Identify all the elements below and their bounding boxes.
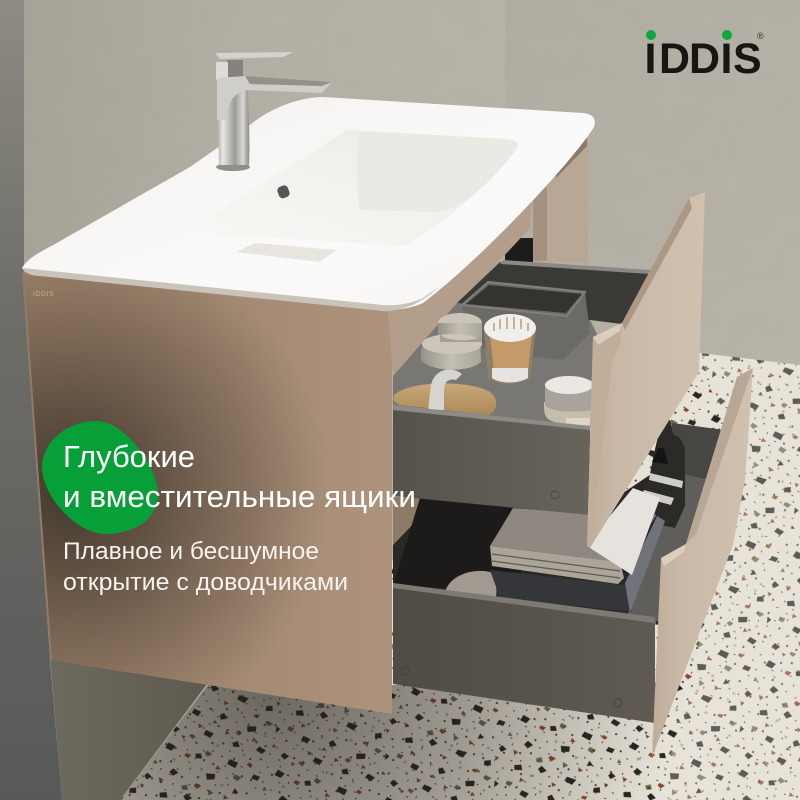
dark towel — [490, 570, 632, 612]
terrazzo floor — [120, 353, 800, 800]
lower drawer right wall — [628, 423, 724, 622]
basin reflection — [236, 243, 336, 262]
lower drawer front panel — [652, 368, 753, 757]
upper drawer front panel — [587, 192, 705, 548]
subheading — [63, 538, 348, 596]
cabinet body — [22, 272, 392, 714]
logo: IDDIS: IDDIS — [644, 35, 762, 83]
upper drawer floor — [393, 303, 600, 428]
cork brush — [393, 369, 496, 415]
heading: Глубокие — [63, 439, 195, 474]
faucet — [215, 52, 332, 171]
heading: и вместительные ящики — [63, 479, 416, 514]
logo: IDDIS: ® — [757, 31, 764, 41]
subheading: Плавное и бесшумное — [63, 538, 319, 565]
upper drawer back wall — [457, 262, 650, 324]
overflow — [276, 184, 291, 199]
cabinet opening frame — [388, 197, 532, 545]
heading — [63, 439, 416, 514]
lower drawer side — [393, 588, 655, 723]
lower drawer — [393, 368, 753, 757]
cup with cotton swabs — [484, 314, 536, 384]
upper drawer — [393, 192, 705, 548]
subheading: открытие с доводчиками — [63, 569, 348, 596]
round cream jar — [544, 376, 593, 426]
lower drawer interior — [393, 428, 720, 625]
ceramic countertop with basin — [22, 97, 595, 311]
upper drawer rim — [393, 405, 590, 432]
steel cylinder — [445, 571, 496, 597]
storage box — [462, 282, 590, 360]
lower drawer rim — [393, 583, 656, 624]
upper drawer side — [393, 410, 590, 515]
stacked jars — [421, 313, 482, 370]
bottles — [639, 420, 685, 528]
basin — [201, 130, 518, 246]
small logo on cabinet: IDDIS — [33, 291, 54, 298]
beige towel — [490, 508, 625, 562]
cabinet back section — [505, 137, 588, 263]
white towel — [590, 488, 660, 575]
green blob accent — [42, 421, 158, 534]
